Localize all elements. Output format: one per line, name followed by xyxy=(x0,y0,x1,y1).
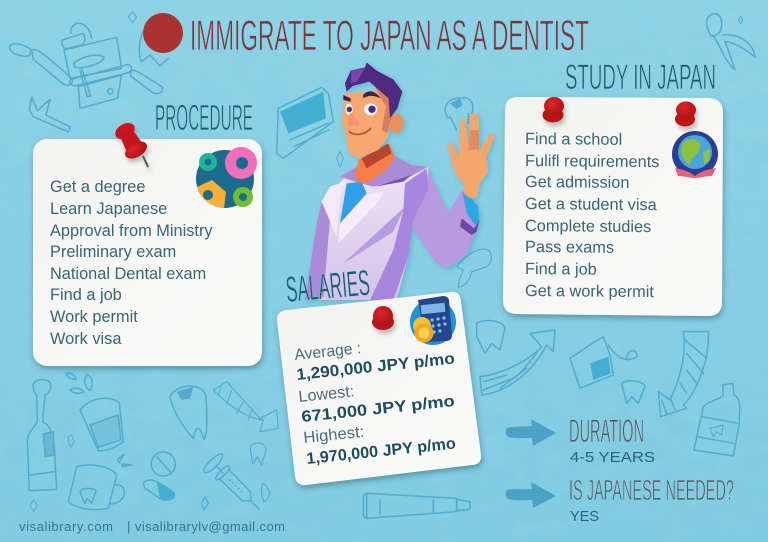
icon: calculator and coins xyxy=(410,296,456,345)
text: is Japanese needed: YES xyxy=(570,508,599,525)
text: duration xyxy=(569,413,655,466)
procedure steps: Learn Japanese xyxy=(50,200,167,218)
icon: tooth, tube and curved arrow doodles xyxy=(480,330,740,456)
study steps: Find a job xyxy=(525,260,597,279)
footer: contact details: | visalibrarylv@gmail.com xyxy=(127,519,285,534)
salary lines xyxy=(294,340,457,468)
procedure steps: Work permit xyxy=(50,308,138,326)
icon: red push pin xyxy=(111,119,150,167)
procedure steps: Preliminary exam xyxy=(50,243,176,261)
footer: contact details: visalibrary.com xyxy=(19,519,113,534)
study steps: Fulifl requirements xyxy=(525,152,659,171)
salary lines: 1,290,000 JPY p/mo xyxy=(296,350,456,384)
icon: globe on book xyxy=(672,131,718,178)
procedure steps: National Dental exam xyxy=(50,265,206,283)
eyes and brows xyxy=(363,91,381,98)
hair xyxy=(345,62,402,118)
arm sleeve xyxy=(408,167,479,268)
title circle xyxy=(143,13,183,53)
arrow: duration xyxy=(506,419,556,446)
red pin right xyxy=(675,102,696,126)
study steps: Complete studies xyxy=(525,217,651,236)
text: is Japanese needed xyxy=(569,475,734,525)
footer: contact details xyxy=(19,519,285,534)
study steps xyxy=(525,130,659,301)
panel: procedure xyxy=(33,119,262,366)
study steps: Get a work permit xyxy=(525,282,654,301)
study steps: Pass exams xyxy=(525,238,614,257)
text: PROCEDURE xyxy=(155,97,253,138)
panel: salaries xyxy=(277,292,481,485)
icon: gears xyxy=(196,147,257,208)
procedure steps: Work visa xyxy=(50,330,122,348)
procedure steps: Find a job xyxy=(50,286,122,304)
text: SALARIES xyxy=(284,262,371,310)
icon: toothpaste tube doodle xyxy=(363,493,470,518)
nose and smile xyxy=(347,112,360,126)
ear xyxy=(390,113,403,133)
icon: toothbrush, cup and dental doodles xyxy=(27,373,278,518)
coat body xyxy=(305,155,428,300)
study steps: Get admission xyxy=(525,173,629,192)
procedure steps: Get a degree xyxy=(50,178,145,196)
red pin xyxy=(372,306,394,330)
procedure steps: Approval from Ministry xyxy=(50,222,213,240)
salary lines: Average : xyxy=(294,340,362,364)
text: duration: DURATION xyxy=(569,413,644,449)
icon: dental chair doodle xyxy=(9,12,168,132)
salary lines: 1,970,000 JPY p/mo xyxy=(306,435,457,468)
red pin left xyxy=(542,97,564,122)
salary lines: 671,000 JPY p/mo xyxy=(301,393,456,426)
salary lines: Lowest: xyxy=(298,383,355,406)
arrow: Japanese needed xyxy=(506,482,556,508)
face xyxy=(342,90,392,158)
procedure steps xyxy=(50,178,213,348)
character: dentist waving xyxy=(305,62,495,300)
icon: pliers doodle xyxy=(707,14,755,70)
study steps: Get a student visa xyxy=(525,195,658,214)
icon: laptop doodle xyxy=(277,87,491,287)
salary lines: Highest: xyxy=(303,424,365,447)
neck xyxy=(355,145,395,183)
hand xyxy=(448,114,495,198)
study steps: Find a school xyxy=(525,130,622,149)
panel: study in Japan xyxy=(503,97,723,316)
title xyxy=(143,12,589,60)
icon: small tooth doodle xyxy=(477,321,505,353)
text: duration: 4-5 YEARS xyxy=(570,449,655,466)
